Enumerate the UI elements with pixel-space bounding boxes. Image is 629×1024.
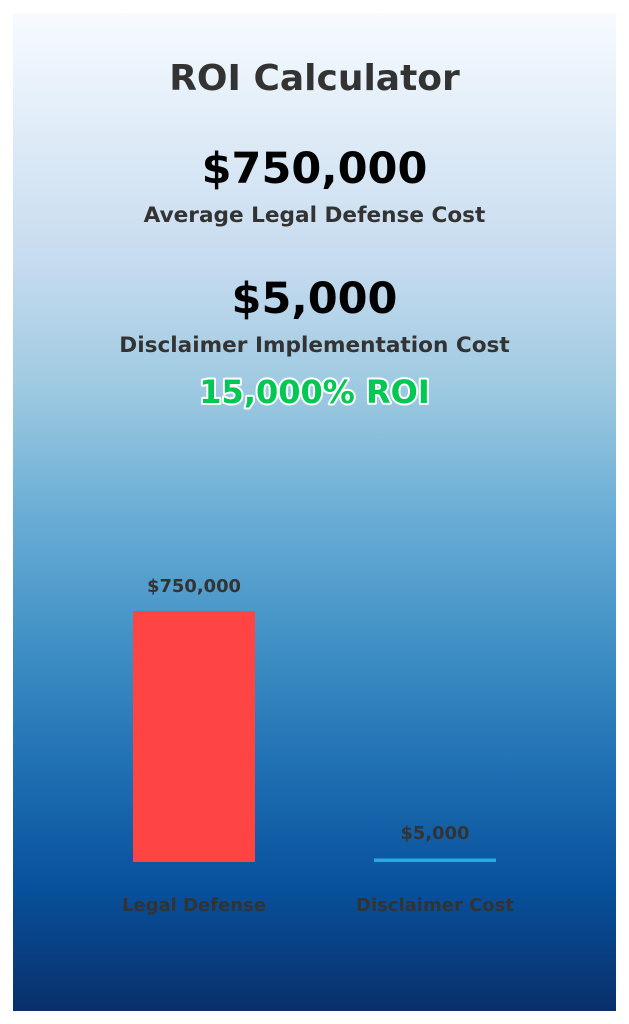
ROI callout: 15,000% ROI [199, 373, 430, 411]
legal defense caption: Average Legal Defense Cost [144, 203, 485, 228]
metric: disclaimer cost [119, 274, 510, 358]
metric: legal defense cost [144, 144, 485, 228]
bar chart [122, 576, 514, 916]
legal defense bar value: $750,000 [147, 576, 241, 597]
disclaimer bar label: Disclaimer Cost [356, 895, 514, 916]
disclaimer value: $5,000 [232, 274, 397, 324]
title: ROI Calculator [169, 58, 460, 99]
disclaimer bar [374, 858, 496, 862]
bar: legal defense [122, 576, 266, 916]
disclaimer caption: Disclaimer Implementation Cost [119, 333, 510, 358]
disclaimer bar value: $5,000 [400, 823, 470, 844]
legal defense bar label: Legal Defense [122, 895, 266, 916]
legal defense value: $750,000 [202, 144, 427, 194]
bar: disclaimer cost [356, 823, 514, 916]
legal defense bar [133, 611, 255, 862]
